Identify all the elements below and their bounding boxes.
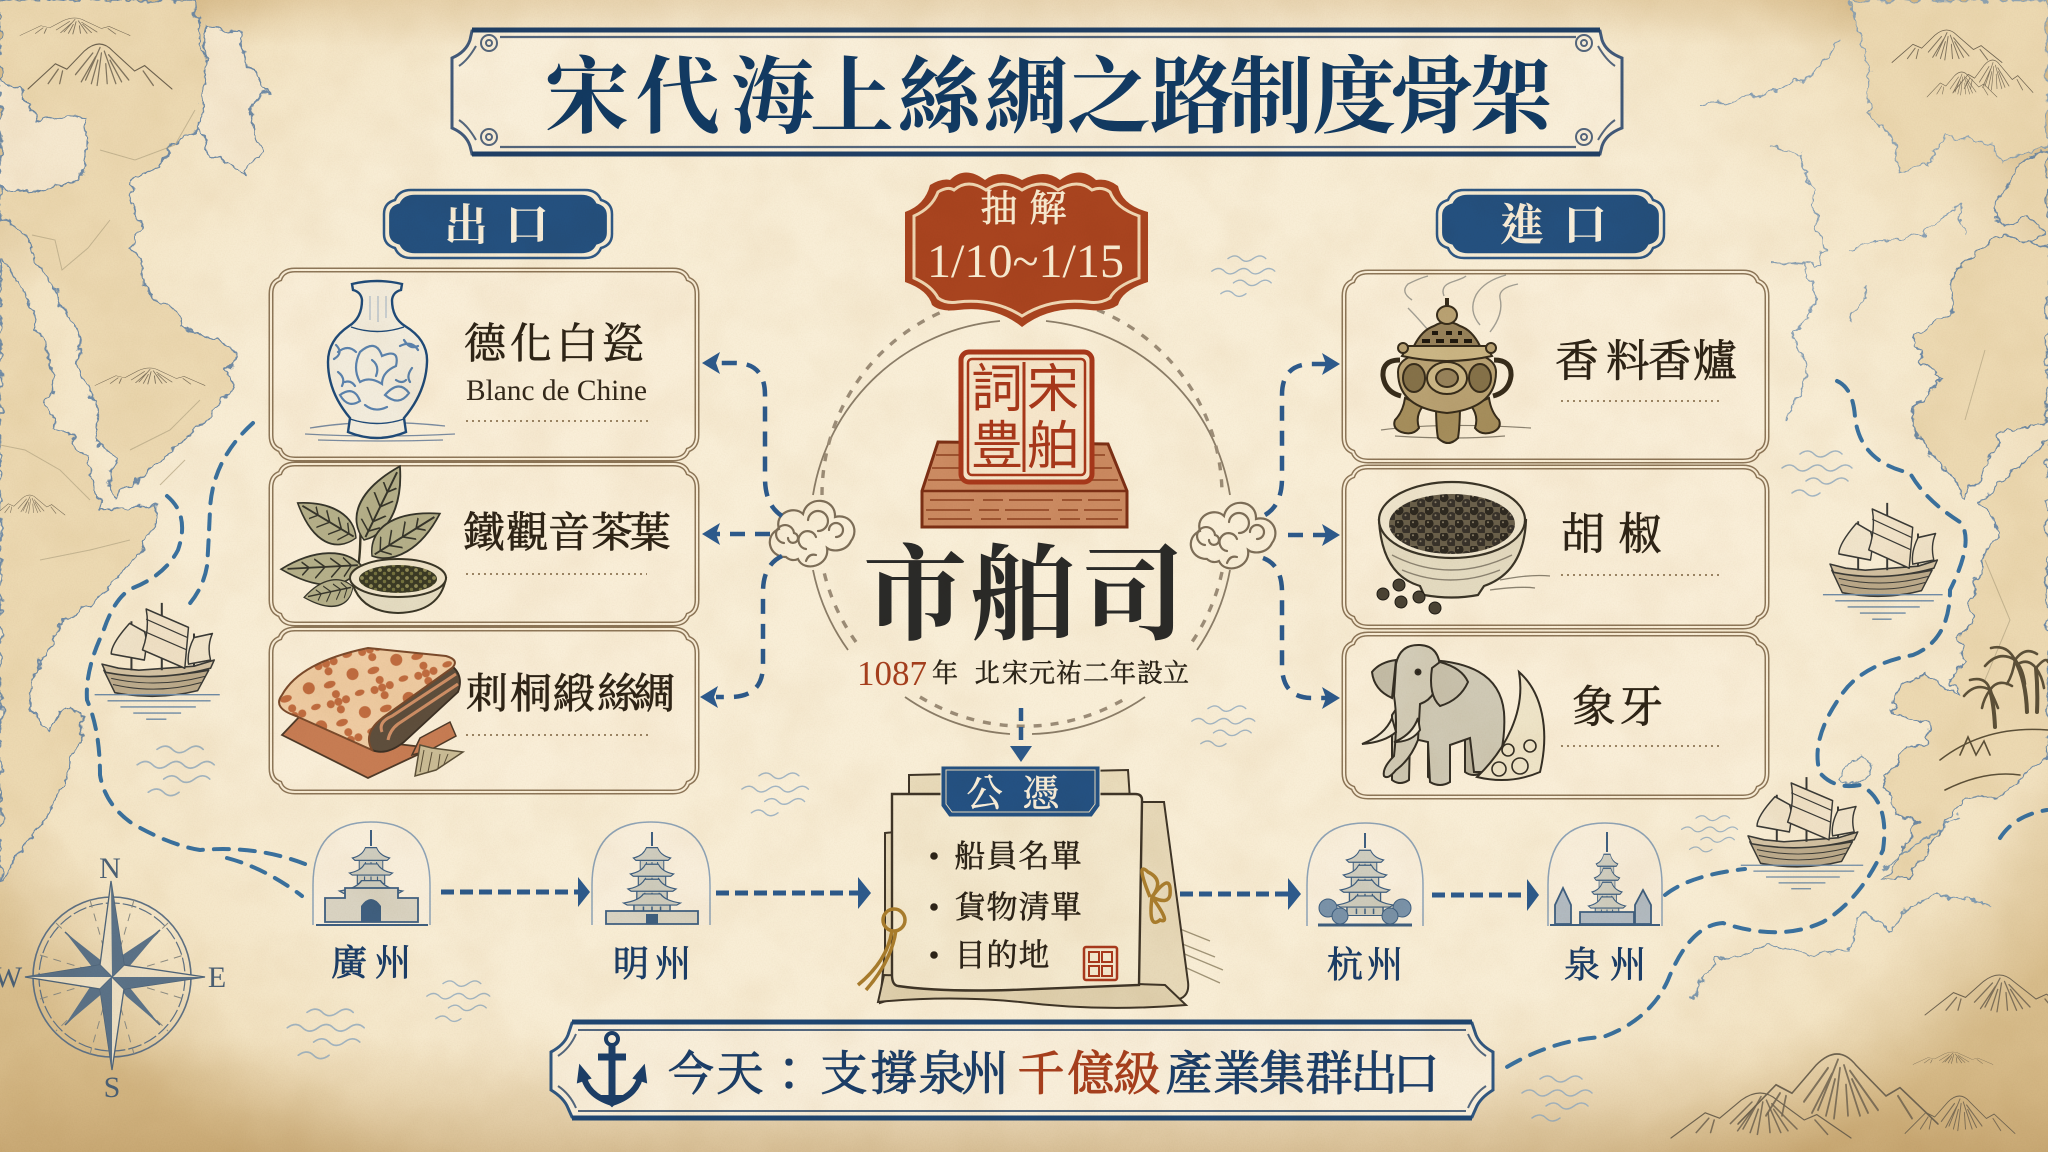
founding year line (857, 654, 1189, 693)
string knots (858, 869, 1170, 990)
item name: 香料香爐 (1555, 337, 1737, 386)
ship: right lower (1741, 777, 1863, 889)
footer text: 今天：支撐泉州產業集群出口 (668, 1049, 1440, 1101)
city: Quanzhou (1548, 823, 1662, 985)
city: Mingzhou: 明州 (613, 944, 691, 984)
icon: elephant and tusk (1362, 645, 1544, 785)
arrow: Guangzhou to Mingzhou (441, 877, 590, 907)
arrow: Mingzhou to certificate (716, 877, 871, 909)
founding year line: 北宋元祐二年設立 (974, 659, 1189, 688)
sea route: left coast (87, 423, 310, 896)
title banner (452, 30, 1622, 154)
card: pepper (1344, 467, 1767, 627)
card: incense and censer (1344, 272, 1767, 461)
city: Mingzhou (592, 822, 710, 984)
item name: 刺桐緞絲綢 (466, 672, 675, 718)
item name: 象牙 (1572, 683, 1663, 732)
item subtitle: Blanc de Chine (466, 374, 647, 407)
map: inland rivers (0, 110, 2010, 680)
badge: lottery date: 抽解 (980, 189, 1066, 230)
seal on wooden base (922, 352, 1127, 527)
city: Guangzhou (313, 822, 430, 983)
highlighted figure: 千億級 (1018, 1049, 1160, 1101)
compass rose (0, 852, 226, 1104)
founding year line: 年 (932, 659, 958, 688)
cloud node: left (770, 501, 854, 566)
certificate list (930, 839, 1082, 973)
arrows: export branches (700, 352, 782, 708)
card: Zayton satin silk (271, 629, 697, 792)
cloud node: right (1191, 503, 1275, 568)
certificate list: 船員名單 (954, 839, 1082, 874)
icon: tea leaves and bowl (280, 458, 448, 613)
certificate list: 貨物清單 (954, 890, 1082, 925)
sea route: right coast (1502, 381, 2047, 1070)
card: Dehua porcelain (271, 270, 697, 459)
certificate scroll (858, 766, 1223, 1008)
seal on wooden base: 豊舶 (971, 418, 1079, 476)
badge: lottery date (905, 172, 1148, 327)
central medallion rings (813, 295, 1230, 734)
compass rose: N (99, 852, 121, 885)
city: Quanzhou: 泉州 (1564, 945, 1646, 985)
ship: left (95, 603, 220, 719)
title text: 宋代海上絲綢之路制度骨架 (545, 52, 1553, 145)
icon: white porcelain vase (305, 281, 455, 441)
header pill: export: 出口 (444, 201, 549, 250)
card: Tieguanyin tea (271, 458, 697, 624)
badge: lottery date: 1/10~1/15 (927, 235, 1124, 288)
seal on wooden base: 詞宋 (971, 361, 1079, 419)
certificate header (941, 766, 1100, 817)
certificate header: 公憑 (966, 773, 1060, 815)
arrow: Hangzhou to Quanzhou (1432, 879, 1539, 911)
heading: Maritime Trade Office: 市舶司 (863, 539, 1185, 654)
certificate list: 目的地 (954, 938, 1050, 973)
ship: right upper (1823, 503, 1943, 619)
small red stamp (1084, 947, 1117, 980)
founding year line: 1087 (857, 654, 927, 693)
arrows: import branches (1263, 353, 1340, 709)
city: Hangzhou: 杭州 (1327, 945, 1403, 985)
icon: bronze censer (1381, 275, 1531, 443)
header pill: import: 進口 (1500, 201, 1607, 250)
compass rose: S (104, 1071, 120, 1104)
item name: 胡椒 (1561, 510, 1662, 559)
arrow: certificate to Hangzhou (1180, 878, 1301, 910)
city: Hangzhou (1307, 823, 1423, 985)
icon: anchor (578, 1033, 646, 1106)
map: palm trees (1940, 647, 2048, 790)
header pill: export (384, 190, 612, 258)
item name: 鐵觀音茶葉 (463, 510, 671, 557)
city: Guangzhou: 廣州 (331, 943, 411, 983)
footer banner (551, 1022, 1493, 1118)
arrow: office to certificate (1010, 708, 1032, 762)
wave decorations (137, 256, 1852, 1121)
card: ivory (1344, 634, 1767, 797)
icon: bowl of pepper (1377, 482, 1550, 614)
compass rose: E (208, 961, 226, 994)
header pill: import (1437, 190, 1664, 258)
item name: 德化白瓷 (464, 322, 644, 368)
icon: folded silk (279, 648, 463, 778)
